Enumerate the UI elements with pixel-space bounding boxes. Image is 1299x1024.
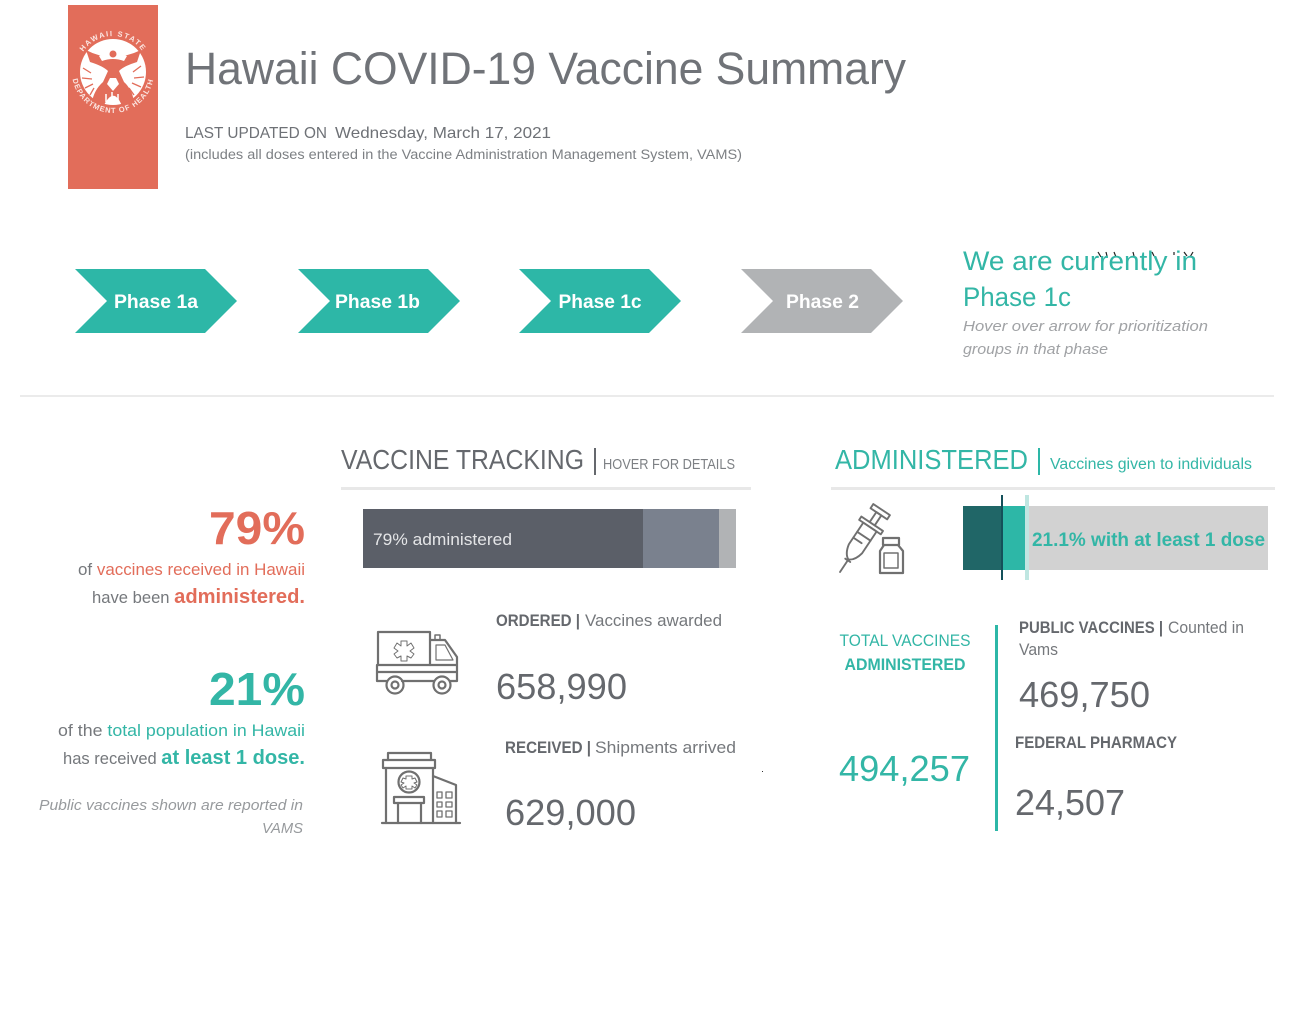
current phase heading: [963, 246, 1197, 312]
heading: vaccine tracking: [341, 444, 751, 490]
last updated date: Wednesday, March 17, 2021: [335, 125, 551, 142]
ordered label: Vaccines awarded: [585, 612, 722, 630]
icon: hospital building: [382, 753, 460, 823]
received label: RECEIVED |: [505, 739, 591, 757]
stacked bar: vaccine tracking: [363, 509, 736, 568]
heading: administered: Vaccines given to individuals: [1050, 456, 1252, 473]
arrow: Phase 2: Phase 2: [786, 291, 859, 313]
footnote: [39, 797, 303, 837]
public vaccines value: 469,750: [1019, 674, 1150, 715]
heading: administered: [831, 444, 1275, 490]
ordered label: ORDERED |: [496, 612, 580, 630]
stray dot: [762, 771, 763, 772]
ordered value: 658,990: [496, 666, 627, 707]
stat: 21% at least 1 dose: 21%: [209, 663, 305, 715]
administered progress bar: 21.1% with at least 1 dose: [1032, 529, 1265, 551]
icon: syringe and vial: [829, 502, 903, 579]
logo: Hawaii State Department of Health: HAWAII STATE: [79, 30, 146, 52]
total vaccines administered label: TOTAL VACCINES: [840, 632, 970, 650]
public vaccines label: Counted in: [1168, 619, 1244, 637]
arrow: Phase 1c: Phase 1c: [558, 291, 642, 313]
data source note: (includes all doses entered in the Vaccine Administration Management System, VAMS): [185, 147, 742, 162]
logo: Hawaii State Department of Health: DEPARTMENT OF HEALTH: [72, 78, 154, 113]
stat: 79% administered: 79%: [209, 502, 305, 554]
stat: 79% administered: [78, 502, 305, 608]
ordered label: [496, 612, 722, 630]
arrow: Phase 1a: Phase 1a: [114, 291, 198, 313]
logo: Hawaii State Department of Health: [68, 5, 158, 189]
heading: vaccine tracking: VACCINE TRACKING: [341, 444, 584, 475]
stat: 79% administered: have been administered.: [92, 586, 305, 608]
footnote: Public vaccines shown are reported in: [39, 797, 303, 814]
federal pharmacy label: FEDERAL PHARMACY: [1015, 734, 1177, 752]
federal pharmacy value: 24,507: [1015, 782, 1125, 823]
public vaccines label: PUBLIC VACCINES |: [1019, 619, 1163, 637]
current phase heading: Phase 1c: [963, 282, 1071, 312]
received label: [505, 739, 736, 757]
arrow: Phase 1a: [75, 269, 237, 333]
title: Hawaii COVID-19 Vaccine Summary: [185, 43, 906, 94]
stat: 21% at least 1 dose: of the total population in Hawaii: [58, 722, 305, 740]
clipped stray text fragment: [1098, 252, 1193, 257]
arrow: Phase 1b: [298, 269, 460, 333]
hover instruction: Hover over arrow for prioritization: [963, 318, 1208, 335]
hover instruction: groups in that phase: [963, 341, 1108, 358]
icon: ambulance: [377, 632, 457, 694]
last updated date: [185, 125, 551, 142]
total vaccines value: 494,257: [839, 748, 970, 789]
arrow: Phase 1b: Phase 1b: [335, 291, 420, 313]
heading: vaccine tracking: HOVER FOR DETAILS: [603, 457, 735, 473]
total vaccines administered label: ADMINISTERED: [844, 656, 966, 674]
hover instruction: [963, 318, 1208, 358]
stat: 21% at least 1 dose: [58, 663, 305, 769]
stat: 79% administered: of vaccines received in Hawaii: [78, 561, 305, 579]
arrow: Phase 2: [741, 269, 903, 333]
arrow: Phase 1c: [519, 269, 681, 333]
heading: administered: ADMINISTERED: [835, 444, 1028, 475]
received value: 629,000: [505, 792, 636, 833]
administered progress bar: [963, 495, 1268, 580]
public vaccines label: [1019, 619, 1244, 659]
received label: Shipments arrived: [595, 739, 736, 757]
stacked bar: vaccine tracking: 79% administered: [373, 531, 512, 549]
stat: 21% at least 1 dose: has received at least 1 dose.: [63, 747, 305, 769]
last updated date: LAST UPDATED ON: [185, 125, 327, 142]
total vaccines administered label: [840, 632, 970, 674]
current phase heading: We are currently in: [963, 246, 1197, 276]
public vaccines label: Vams: [1019, 641, 1058, 659]
footnote: VAMS: [262, 820, 303, 837]
